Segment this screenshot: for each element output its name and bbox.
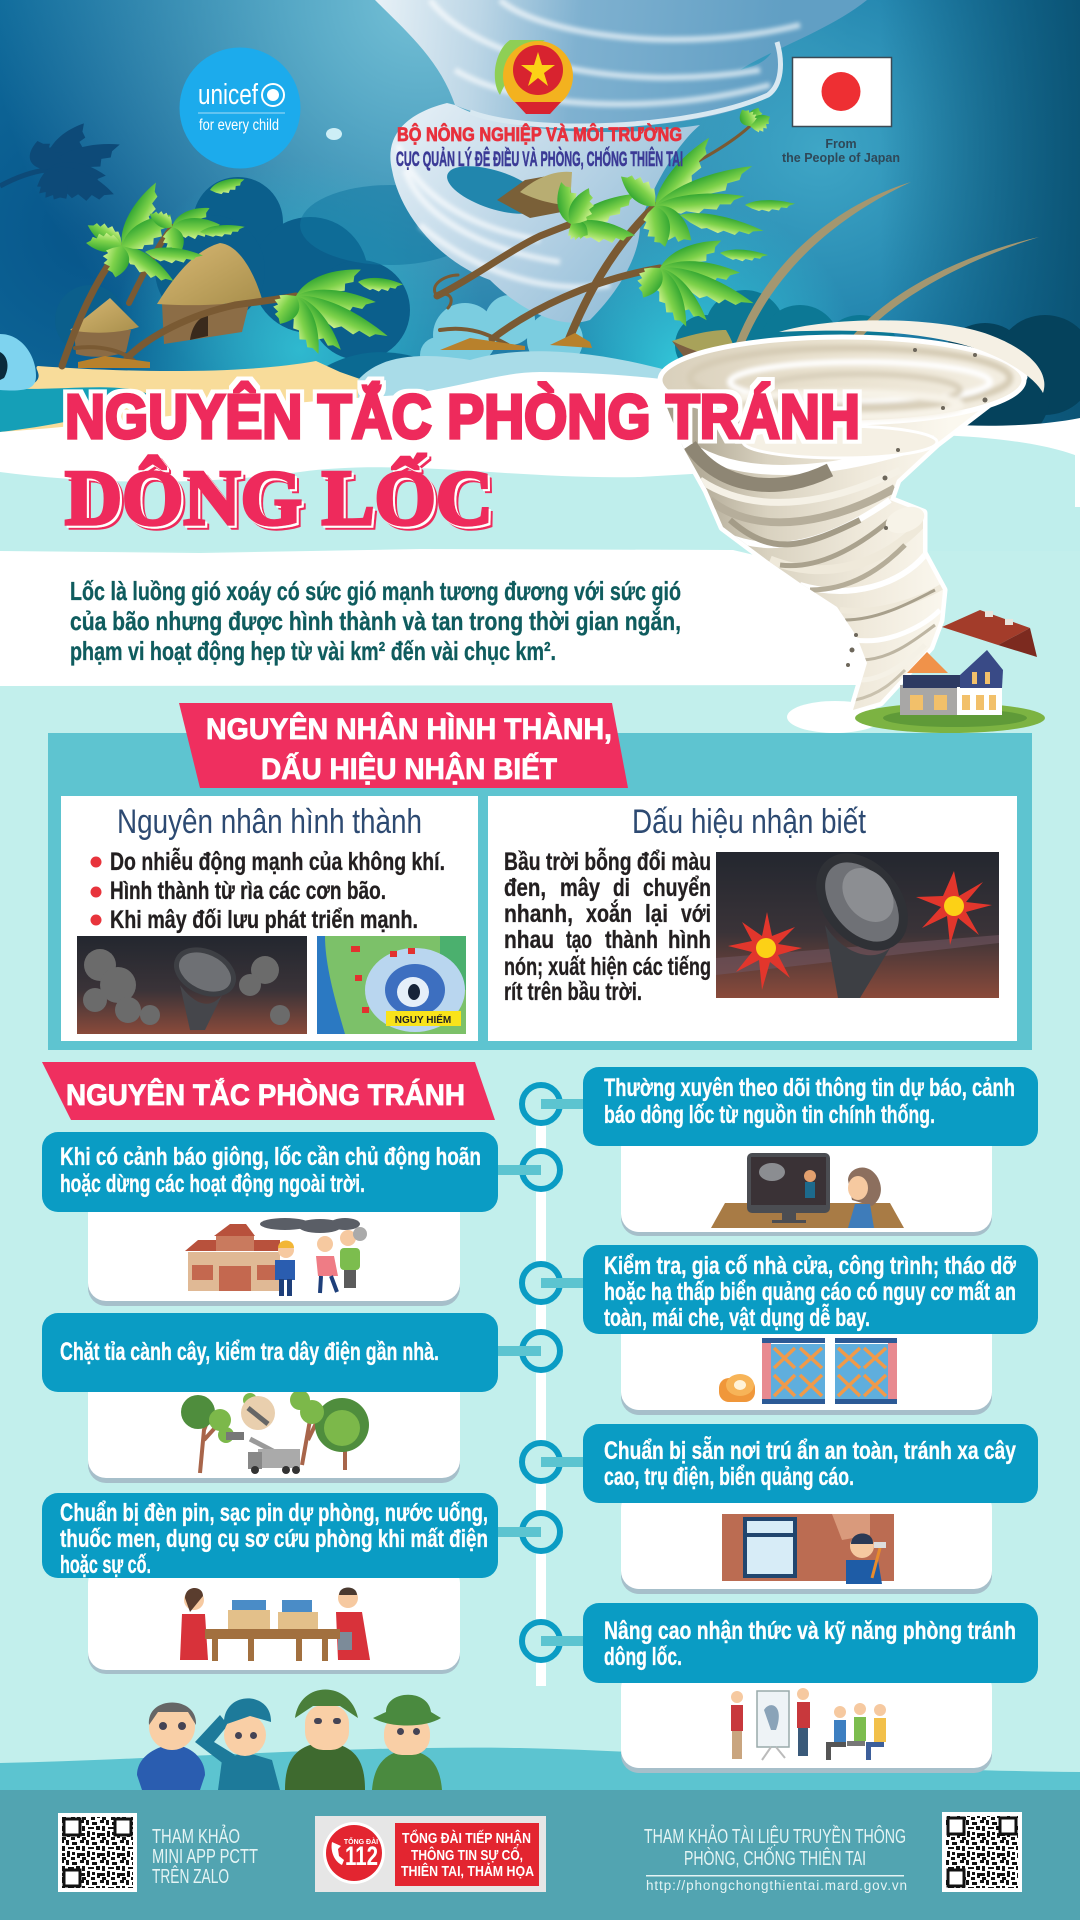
card: emergency supplies: thuốc men, dụng cụ sơ cứu phòng khi mất điện [60, 1525, 488, 1553]
silhouette palm [0, 117, 125, 212]
title [65, 383, 860, 541]
image: forecast map: NGUY HIỂM [395, 1013, 451, 1026]
header storm scene [0, 0, 1080, 470]
zalo reference text: MINI APP PCTT [152, 1846, 258, 1868]
illustration: school and evacuees [185, 1218, 367, 1296]
hotline 112: THÔNG TIN SỰ CỐ, [411, 1846, 523, 1864]
zalo reference text: TRÊN ZALO [152, 1865, 229, 1888]
illustration: taped windows [719, 1338, 897, 1404]
document reference text: http://phongchongthientai.mard.gov.vn [646, 1878, 907, 1893]
clouds [55, 177, 1080, 445]
panel: warning signs: với [681, 900, 711, 928]
image: forecast map [317, 936, 466, 1034]
card: reinforce houses [583, 1245, 1038, 1415]
image: storm clouds [77, 936, 307, 1034]
huts [70, 172, 738, 378]
ministry name [396, 124, 683, 171]
card: safe shelter [583, 1424, 1038, 1594]
intro text [70, 576, 681, 666]
illustration: cracked wall and man [722, 1514, 894, 1584]
logo: Japan flag [782, 58, 900, 165]
panel: warning signs: đen, [504, 874, 546, 902]
card: reinforce houses: toàn, mái che, vật dụng dễ bay. [604, 1302, 870, 1332]
title: DÔNG LỐC [65, 454, 493, 541]
card: warning, stop outdoor activities: Khi có cảnh báo giông, lốc cần chủ động hoãn [60, 1143, 481, 1171]
title: NGUYÊN TẮC PHÒNG TRÁNH [65, 383, 860, 452]
hotline 112: TỔNG ĐÀI TIẾP NHẬN [402, 1829, 531, 1847]
timeline nodes [496, 1085, 586, 1660]
logo: UNICEF: for every child [199, 117, 279, 134]
document reference text [644, 1825, 907, 1893]
hotline 112 [315, 1816, 546, 1892]
illustration: four people [137, 1690, 442, 1790]
logo: Japan flag: the People of Japan [782, 150, 900, 165]
beach [0, 334, 420, 440]
bare bending trunks [730, 182, 1039, 360]
zalo reference text: THAM KHẢO [152, 1825, 240, 1848]
card: trim trees [42, 1313, 498, 1483]
card: safe shelter: cao, trụ điện, biển quảng cáo. [604, 1463, 854, 1491]
logo: UNICEF: unicef [198, 79, 259, 111]
panel: formation causes: Do nhiễu động mạnh của không khí. [110, 846, 445, 876]
blue-white tornado in background [375, 0, 867, 323]
panel: warning signs [488, 796, 1017, 1041]
ground wave [0, 1748, 1080, 1800]
intro text: của bão nhưng được hình thành và tan trong thời gian ngắn, [70, 606, 681, 636]
heading ribbon [179, 703, 628, 788]
small house and flying roof [855, 610, 1045, 733]
panel: warning signs: nhanh, [504, 900, 573, 928]
panel: warning signs: hình [668, 926, 711, 954]
panel: warning signs: tạo [566, 926, 592, 954]
footer [0, 1790, 1080, 1920]
hotline 112: 112 [345, 1841, 378, 1871]
panel: formation causes [61, 796, 478, 1041]
card: follow forecasts: báo dông lốc từ nguồn tin chính thống. [604, 1101, 935, 1129]
panel: warning signs: thành [605, 926, 658, 954]
panel: warning signs: nhau [504, 926, 554, 954]
card: trim trees: Chặt tỉa cành cây, kiểm tra dây điện gần nhà. [60, 1338, 439, 1366]
section ribbon: prevention principles: NGUYÊN TẮC PHÒNG TRÁNH [66, 1078, 465, 1112]
card: emergency supplies [42, 1493, 498, 1674]
hotline 112: THIÊN TAI, THẢM HỌA [401, 1862, 534, 1880]
heading ribbon: DẤU HIỆU NHẬN BIẾT [261, 752, 557, 786]
panel: warning signs: Dấu hiệu nhận biết [632, 803, 866, 841]
logo: ministry emblem [495, 40, 573, 114]
section ribbon: prevention principles [42, 1062, 495, 1120]
heading ribbon: NGUYÊN NHÂN HÌNH THÀNH, [206, 712, 612, 746]
panel: warning signs: lại [645, 900, 668, 928]
panel: formation causes: Nguyên nhân hình thành [117, 803, 422, 841]
image: tornado with lightning [716, 842, 999, 998]
card: warning, stop outdoor activities: hoặc dừng các hoạt động ngoài trời. [60, 1170, 365, 1198]
QR code: mini app [58, 1813, 137, 1892]
person: soldier with hat [372, 1695, 442, 1790]
panel: warning signs: nón; xuất hiện các tiếng [504, 953, 711, 981]
panel: warning signs: di [613, 874, 630, 902]
person: student [137, 1702, 205, 1790]
beige tornado [660, 320, 1044, 710]
person: saluting [195, 1698, 280, 1790]
card: warning, stop outdoor activities [42, 1132, 498, 1306]
illustration: volunteers with table [180, 1588, 370, 1661]
logo: Japan flag: From [825, 137, 857, 151]
illustration: woman watching TV [711, 1153, 904, 1228]
white wave and light teal wave [0, 351, 1080, 733]
intro text: phạm vi hoạt động hẹp từ vài km² đến vài chục km². [70, 636, 556, 666]
panel: warning signs: mây [560, 874, 600, 902]
panel: warning signs: rít trên bầu trời. [504, 978, 642, 1006]
palm trees [62, 105, 795, 368]
logo: UNICEF [180, 48, 300, 168]
ministry name: BỘ NÔNG NGHIỆP VÀ MÔI TRƯỜNG [397, 124, 682, 146]
illustration: trees and lift truck [181, 1390, 369, 1474]
timeline spine [536, 1120, 546, 1686]
panel: formation causes: Khi mây đối lưu phát triển mạnh. [110, 906, 418, 934]
card: raise awareness: dông lốc. [604, 1643, 682, 1671]
panel: warning signs: xoắn [586, 898, 632, 928]
document reference text: PHÒNG, CHỐNG THIÊN TAI [684, 1846, 866, 1870]
person: officer with helmet [285, 1690, 365, 1790]
panel: warning signs: chuyển [643, 874, 711, 902]
illustration: training session [731, 1688, 886, 1760]
card: follow forecasts [583, 1067, 1038, 1236]
intro text: Lốc là luồng gió xoáy có sức gió mạnh tương đương với sức gió [70, 576, 681, 606]
QR code: documents [942, 1812, 1022, 1892]
card: emergency supplies: Chuẩn bị đèn pin, sạc pin dự phòng, nước uống, [60, 1499, 488, 1527]
card: emergency supplies: hoặc sự cố. [60, 1551, 151, 1579]
zalo reference text [152, 1825, 258, 1888]
panel: formation causes: Hình thành từ rìa các cơn bão. [110, 877, 386, 905]
card: raise awareness [583, 1603, 1038, 1773]
document reference text: THAM KHẢO TÀI LIỆU TRUYỀN THÔNG [644, 1825, 906, 1848]
ministry name: CỤC QUẢN LÝ ĐÊ ĐIỀU VÀ PHÒNG, CHỐNG THIÊN TAI [396, 147, 683, 171]
panel: causes and signs [48, 703, 1032, 1050]
hotline 112: TỔNG ĐÀI [344, 1837, 378, 1846]
panel: warning signs: Bầu trời bỗng đổi màu [504, 846, 711, 876]
